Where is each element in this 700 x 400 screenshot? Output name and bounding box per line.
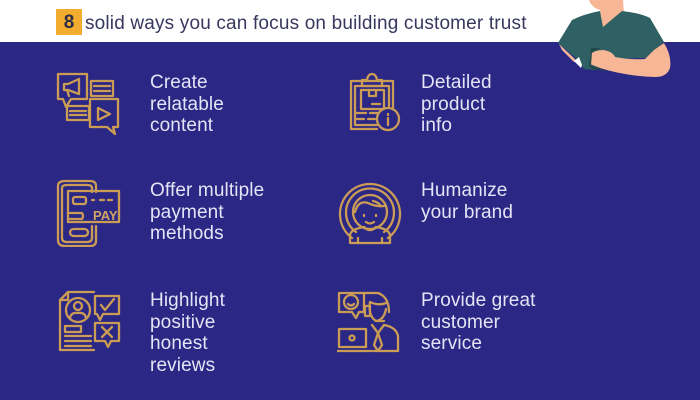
text: payment — [150, 202, 224, 222]
text — [421, 180, 513, 222]
icon: support agent with laptop and smiley — [337, 292, 400, 352]
text: Humanize — [421, 180, 508, 201]
item: provide great customer service — [337, 290, 536, 354]
text: positive — [150, 312, 215, 332]
text — [150, 290, 225, 376]
text: customer — [421, 312, 500, 332]
text — [421, 290, 536, 354]
text: honest — [150, 333, 208, 354]
PAY label: PAY — [93, 208, 118, 223]
text: Detailed — [421, 72, 492, 93]
item: humanize your brand — [338, 180, 513, 244]
text: content — [150, 115, 213, 136]
text: product — [421, 94, 485, 114]
number badge: 8 — [64, 12, 74, 33]
text: Offer multiple — [150, 180, 264, 201]
item: offer multiple payment methods — [56, 180, 264, 247]
text: info — [421, 115, 452, 136]
text: Highlight — [150, 290, 225, 311]
text — [150, 72, 224, 136]
icon: face inside concentric rings — [338, 182, 402, 244]
text — [150, 180, 264, 244]
item: detailed product info — [350, 72, 492, 136]
icon: clipboard with info badge — [350, 72, 400, 132]
heading text: solid ways you can focus on building customer trust — [85, 13, 527, 34]
text: relatable — [150, 94, 224, 114]
text: methods — [150, 223, 224, 244]
text: Provide great — [421, 290, 536, 311]
icon: phone with pay card — [56, 180, 120, 247]
item: highlight positive honest reviews — [58, 290, 225, 376]
icon: profile document with check and cross — [58, 290, 120, 352]
text: your brand — [421, 202, 513, 222]
text — [421, 72, 492, 136]
number badge — [56, 9, 82, 35]
item: create relatable content — [56, 72, 224, 136]
heading — [56, 9, 527, 35]
text: reviews — [150, 354, 215, 376]
text: service — [421, 333, 482, 354]
icon: speech bubbles with megaphone and play — [56, 72, 120, 136]
illustration: person in teal shirt — [558, 0, 670, 77]
text: Create — [150, 72, 208, 93]
